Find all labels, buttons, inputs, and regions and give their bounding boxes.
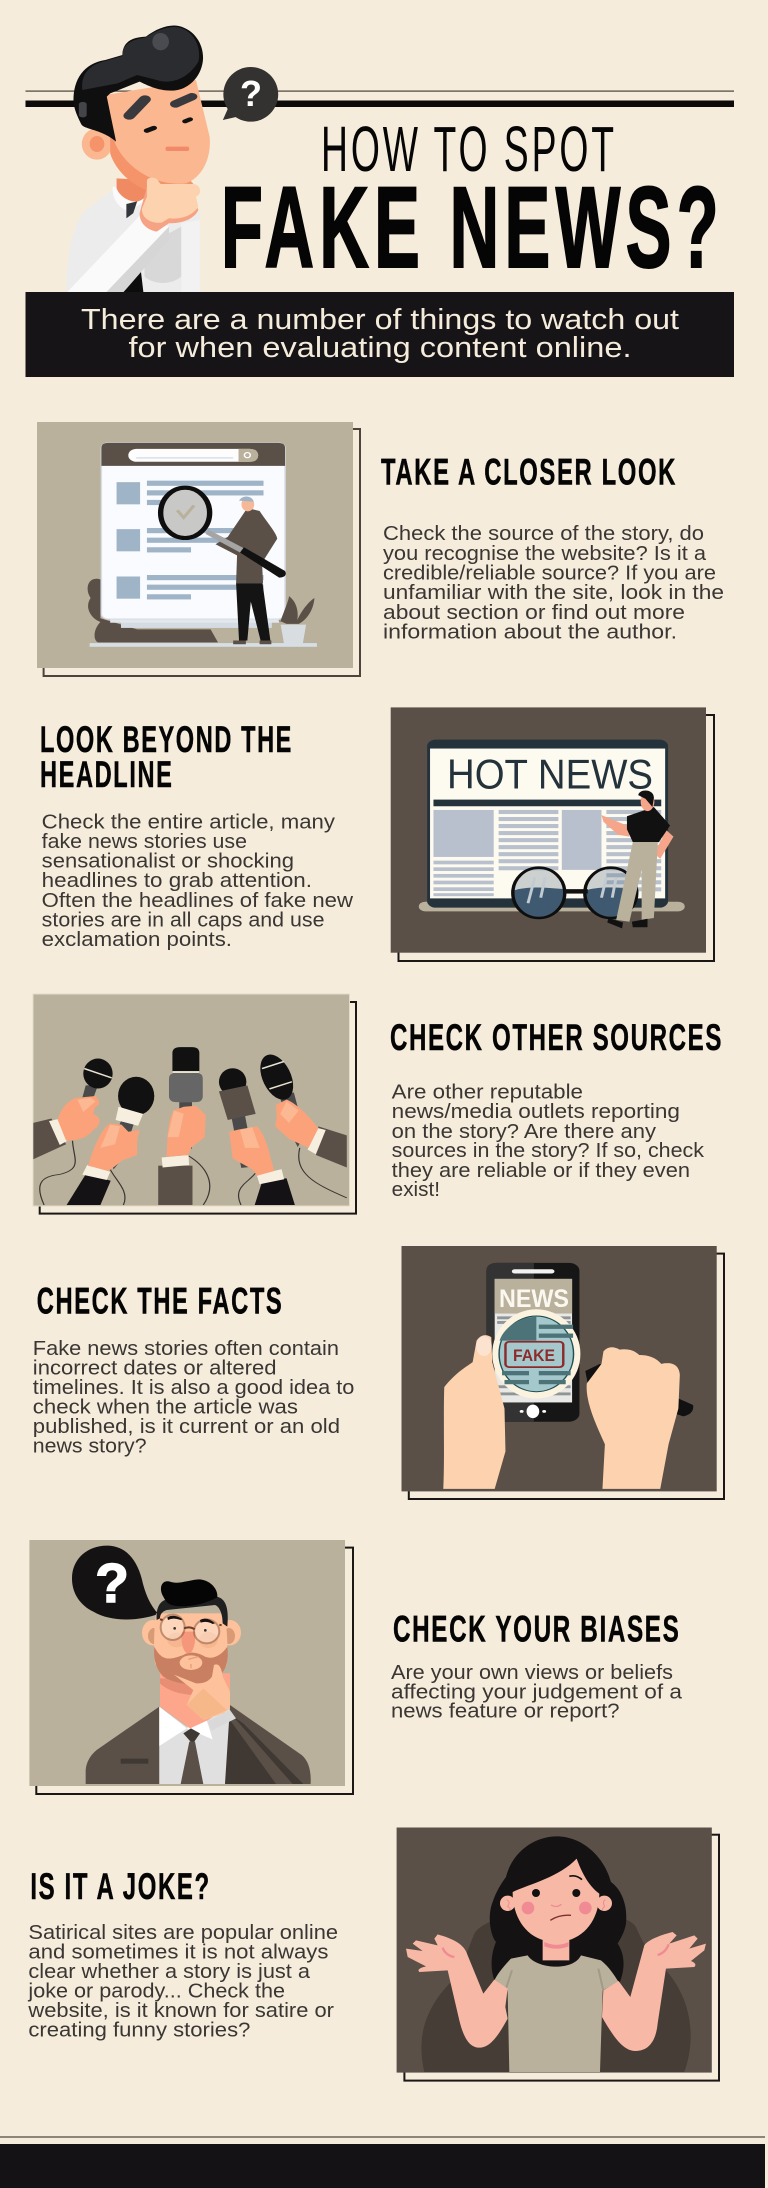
icon: thinking man xyxy=(66,26,210,293)
mic E xyxy=(279,1092,305,1147)
title xyxy=(221,113,724,292)
text: check other sources: on the story? Are there any xyxy=(392,1120,657,1143)
panel: take a closer look xyxy=(37,422,360,676)
text: is it a joke: clear whether a story is just a xyxy=(28,1960,311,1983)
illustration: news tablet with glasses xyxy=(419,740,685,928)
text: take a closer look: you recognise the website? Is it a xyxy=(383,542,707,565)
mic C xyxy=(172,1047,199,1074)
text: look beyond the headline: headlines to grab attention. xyxy=(42,869,312,892)
text: check other sources xyxy=(392,1081,705,1201)
text: check other sources: sources in the story? If so, check xyxy=(392,1139,705,1162)
panel: is it a joke illustration xyxy=(397,1828,719,2081)
text: is it a joke xyxy=(27,1921,338,2042)
heading: look beyond the headline: HEADLINE xyxy=(40,754,174,795)
illustration: hands, phone and magnifier xyxy=(443,1263,693,1489)
text: take a closer look: information about the author. xyxy=(383,621,677,644)
heading: check the facts: CHECK THE FACTS xyxy=(37,1281,283,1322)
text: check other sources: news/media outlets reporting xyxy=(392,1100,680,1123)
text: look beyond the headline: fake news stories use xyxy=(42,830,247,853)
text: look beyond the headline: exclamation points. xyxy=(42,928,232,951)
illustration: thinking bearded man with bubble xyxy=(72,1546,311,1784)
intro banner: for when evaluating content online. xyxy=(128,332,632,364)
text: check the facts: news story? xyxy=(33,1434,147,1458)
text: check your biases: affecting your judgement of a xyxy=(391,1680,683,1703)
text: check other sources: Are other reputable xyxy=(392,1081,583,1104)
text: look beyond the headline xyxy=(42,810,353,951)
text: take a closer look xyxy=(383,522,724,644)
text: check your biases: Are your own views or beliefs xyxy=(391,1661,673,1684)
text: is it a joke: Satirical sites are popular online xyxy=(28,1921,338,1944)
panel: hot news xyxy=(391,707,714,961)
panel: check your biases illustration xyxy=(29,1540,353,1794)
text: take a closer look: unfamiliar with the site, look in the xyxy=(383,581,724,604)
heading: look beyond the headline xyxy=(40,719,293,795)
text: is it a joke: and sometimes it is not always xyxy=(28,1940,328,1963)
mic A xyxy=(71,1085,98,1139)
label: hot news masthead: HOT NEWS xyxy=(447,750,653,798)
text: is it a joke: creating funny stories? xyxy=(28,2018,250,2042)
text: check the facts xyxy=(33,1337,354,1458)
text: check the facts: Fake news stories often contain xyxy=(33,1337,339,1360)
illustration: hands holding microphones xyxy=(33,1047,347,1205)
mic D xyxy=(231,1113,255,1168)
text: is it a joke: joke or parody... Check the xyxy=(27,1980,285,2002)
heading: is it a joke: IS IT A JOKE? xyxy=(30,1866,211,1907)
icon: question speech bubble: ? xyxy=(240,73,262,114)
intro banner xyxy=(26,292,734,377)
text: check the facts: incorrect dates or altered xyxy=(33,1357,276,1380)
illustration: shrugging woman xyxy=(406,1836,706,2072)
footer bar xyxy=(0,2136,765,2188)
text: is it a joke: website, is it known for satire or xyxy=(27,1999,334,2022)
text: take a closer look: Check the source of the story, do xyxy=(383,522,704,545)
header rules xyxy=(26,90,734,107)
text: take a closer look: credible/reliable source? If you are xyxy=(383,561,716,584)
text: take a closer look: about section or find out more xyxy=(383,601,685,624)
intro banner: There are a number of things to watch out xyxy=(81,304,679,336)
text: look beyond the headline: Check the entire article, many xyxy=(42,810,336,833)
icon: question speech bubble xyxy=(223,67,278,122)
text: check the facts: check when the article was xyxy=(33,1396,298,1419)
text: look beyond the headline: sensationalist or shocking xyxy=(42,850,294,873)
icon: question mark: ? xyxy=(95,1552,129,1614)
text: look beyond the headline: stories are in all caps and use xyxy=(42,908,324,931)
text: check the facts: published, is it current or an old xyxy=(33,1415,340,1438)
text: check your biases xyxy=(391,1661,683,1723)
panel: phone with fake news xyxy=(402,1246,724,1499)
text: look beyond the headline: Often the headlines of fake new xyxy=(42,889,353,912)
heading: look beyond the headline: LOOK BEYOND THE xyxy=(40,719,293,760)
text: check other sources: they are reliable or if they even xyxy=(392,1159,690,1182)
label: news: NEWS xyxy=(499,1285,569,1313)
text: check your biases: news feature or report? xyxy=(391,1700,620,1723)
mic B xyxy=(107,1121,135,1169)
text: check the facts: timelines. It is also a good idea to xyxy=(33,1376,354,1399)
panel: microphones xyxy=(33,994,356,1214)
text: check other sources: exist! xyxy=(392,1178,440,1201)
illustration: detective inspecting web page xyxy=(88,443,317,647)
label: fake stamp: FAKE xyxy=(513,1346,555,1365)
